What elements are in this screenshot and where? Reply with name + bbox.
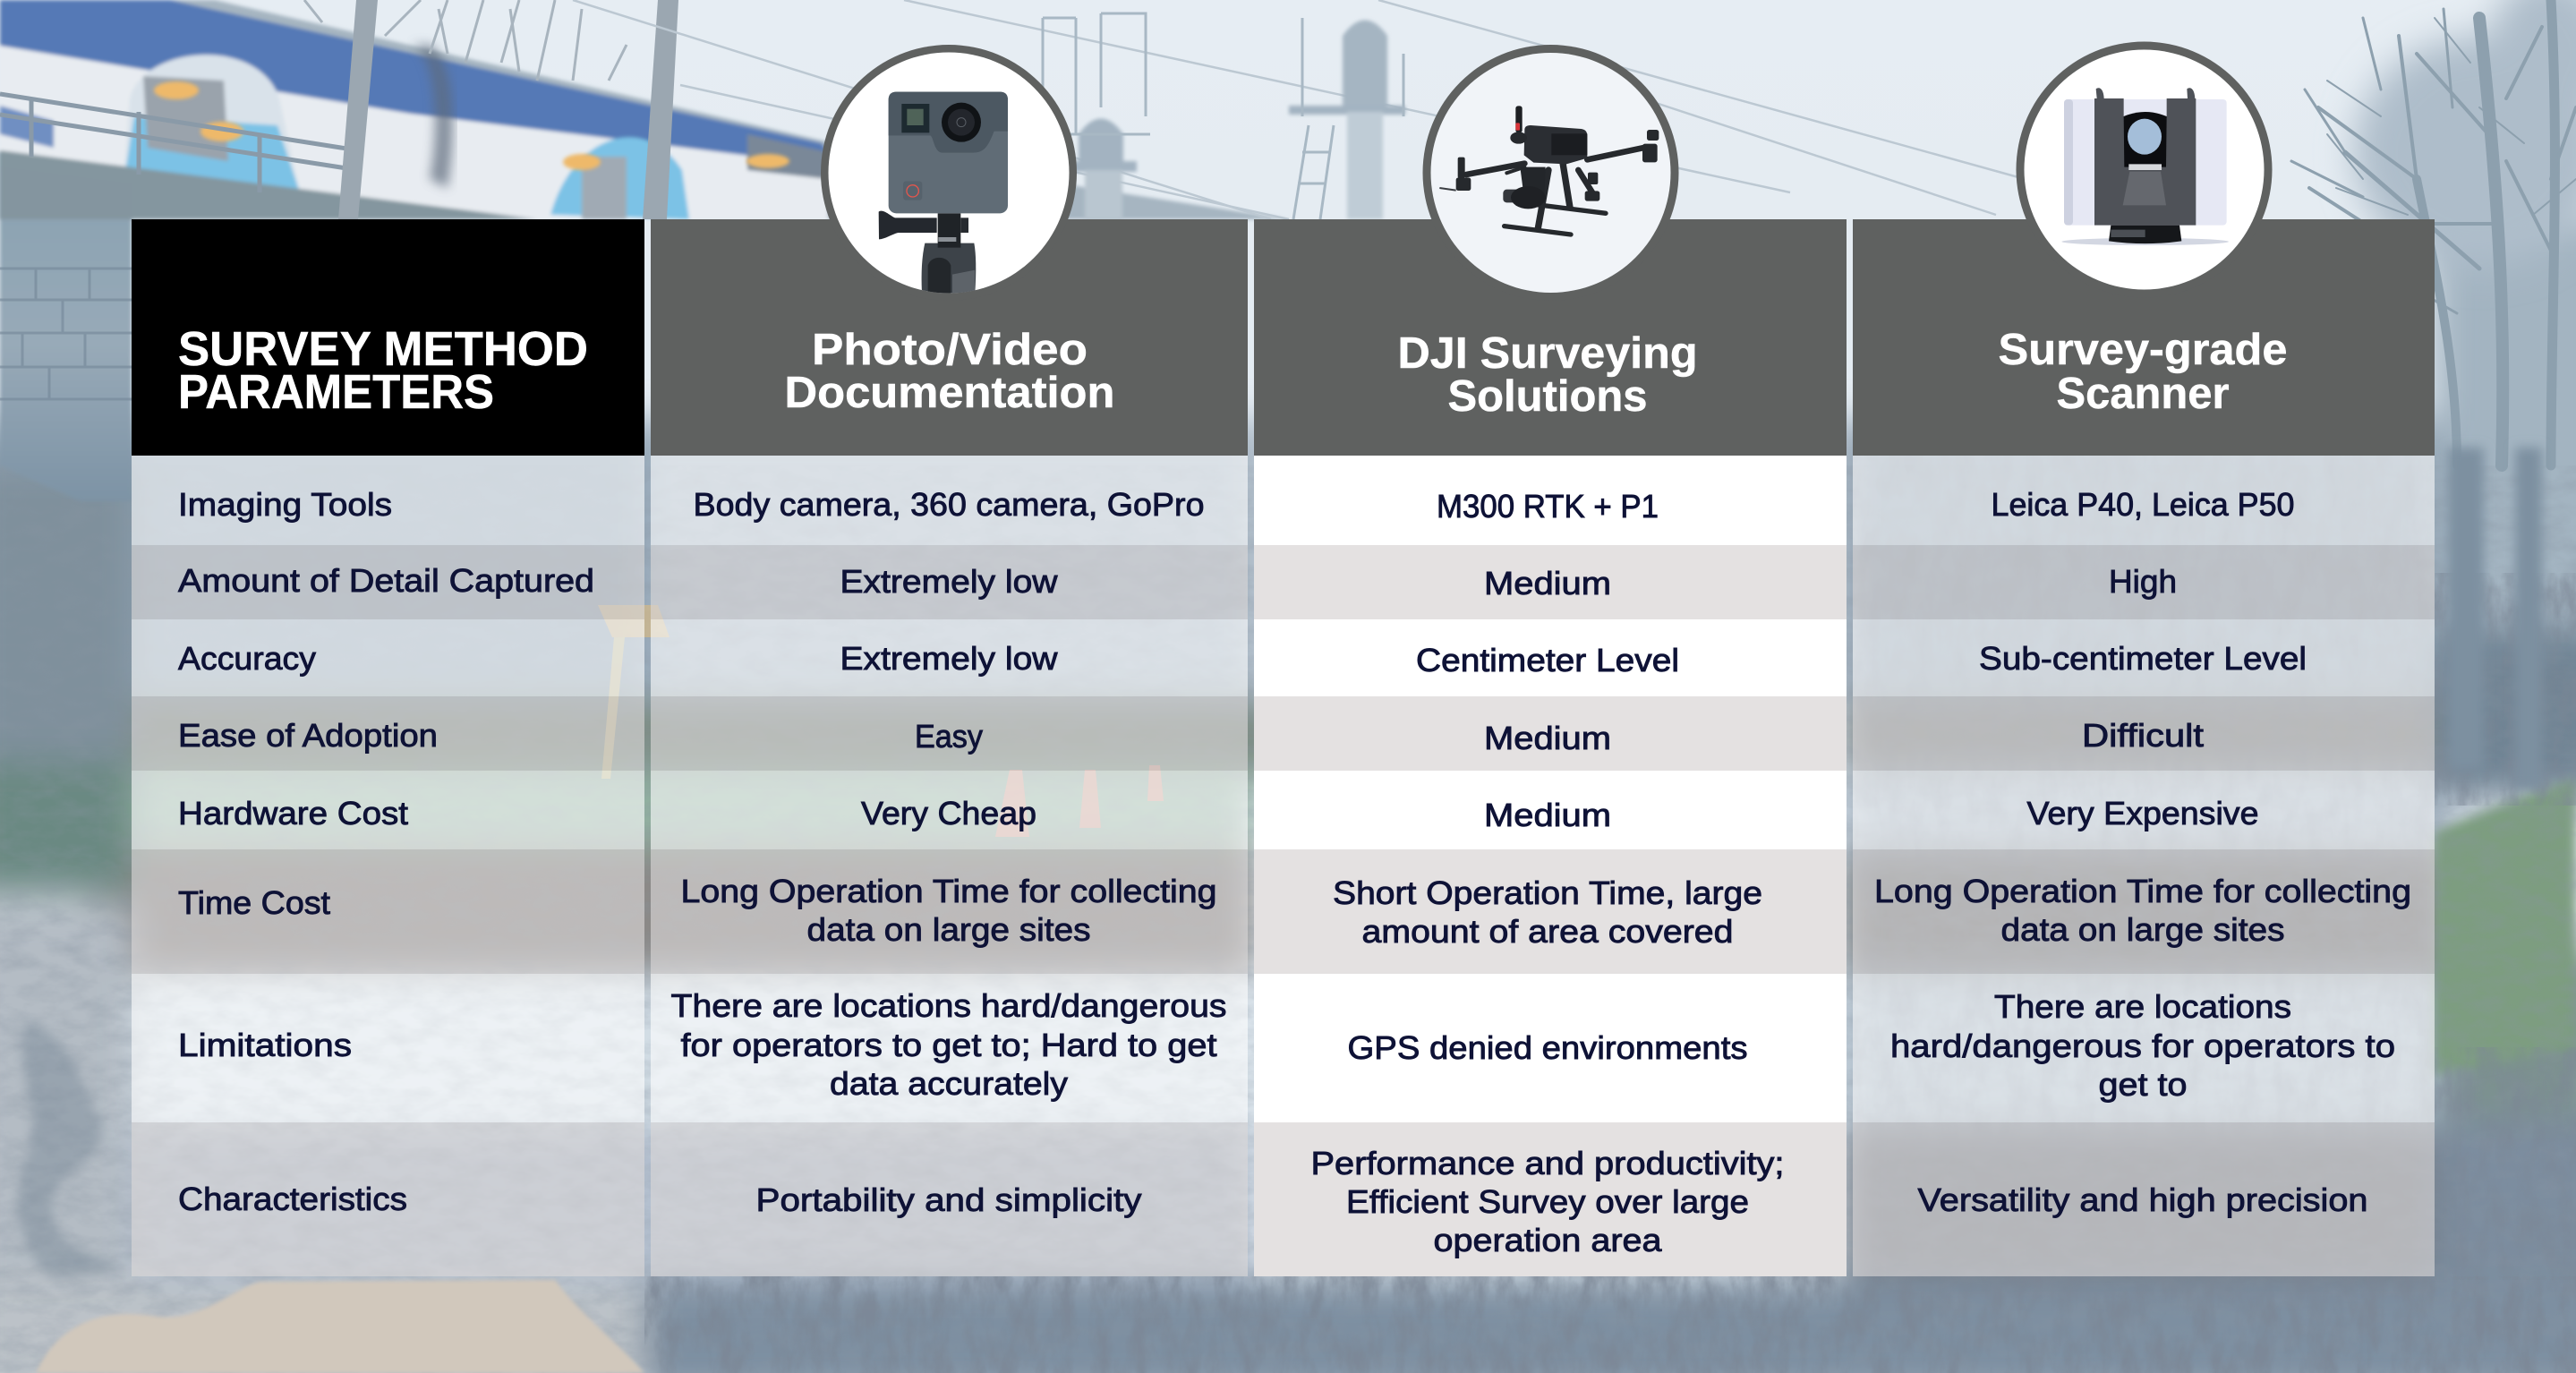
cell: hardware cost: [1853, 771, 2435, 849]
cell: limitations: data accurately: [830, 1065, 1068, 1102]
dark patches in the mud at left: [18, 1020, 125, 1280]
cell: hardware cost: Very Cheap: [861, 795, 1036, 831]
train: [0, 0, 1289, 219]
bare shrubs on bridge: [304, 0, 627, 81]
heading: photo/video documentation: [651, 219, 1248, 456]
green field: [2435, 779, 2576, 1074]
cell: time cost: Long Operation Time for collecting: [680, 873, 1217, 909]
column: photo/video documentation: [651, 219, 1248, 1276]
cell: time cost: Long Operation Time for collecting: [1874, 873, 2411, 909]
cell: characteristics: [1853, 1122, 2435, 1276]
cell: time cost: Short Operation Time, large: [1333, 874, 1762, 911]
cell: amount of detail: High: [2109, 563, 2177, 600]
row label: hardware cost: [132, 771, 644, 849]
heading: dji surveying solutions: [1254, 219, 1847, 456]
heading: dji surveying solutions: DJI Surveying: [1398, 329, 1697, 378]
row label: time cost: [132, 849, 644, 974]
row label: limitations: [132, 974, 644, 1122]
heading: survey-grade scanner: Scanner: [2057, 370, 2229, 418]
right edge vegetation texture: [2435, 573, 2576, 806]
row label: limitations: Limitations: [178, 1027, 352, 1063]
cell: accuracy: [1254, 619, 1847, 696]
cell: accuracy: [1853, 619, 2435, 696]
cell: ease of adoption: Medium: [1484, 720, 1611, 756]
cell: time cost: data on large sites: [807, 911, 1090, 948]
column: survey-grade scanner: [1853, 219, 2435, 1276]
cell: ease of adoption: [1254, 696, 1847, 771]
cell: characteristics: Performance and productivity;: [1310, 1145, 1785, 1181]
cell: limitations: for operators to get to; Hard to get: [680, 1027, 1217, 1063]
heading: survey-grade scanner: [1853, 219, 2435, 456]
row label: characteristics: Characteristics: [178, 1181, 407, 1217]
cell: time cost: [1853, 849, 2435, 974]
cell: characteristics: Versatility and high precision: [1917, 1181, 2368, 1218]
cell: characteristics: [1254, 1122, 1847, 1276]
cell: limitations: [1254, 974, 1847, 1122]
heading: survey method parameters: PARAMETERS: [178, 365, 494, 419]
bare trees on the right: [2291, 0, 2576, 465]
tree crowns on the right: [2354, 0, 2576, 269]
train lights: [154, 81, 789, 170]
cell: limitations: [651, 974, 1248, 1122]
row label: imaging tools: Imaging Tools: [178, 486, 392, 523]
row label: amount of detail captured: [132, 545, 644, 619]
catenary poles: [338, 0, 678, 219]
row label: hardware cost: Hardware Cost: [178, 795, 408, 831]
muddy puddle: [36, 1280, 644, 1373]
cell: limitations: hard/dangerous for operators to: [1890, 1028, 2395, 1064]
table panel: survey method comparison: [132, 219, 2435, 1276]
cell: hardware cost: [1254, 771, 1847, 849]
cell: time cost: [1254, 849, 1847, 974]
cell: imaging tools: [651, 456, 1248, 545]
cell: limitations: GPS denied environments: [1348, 1029, 1747, 1066]
heading: dji surveying solutions: Solutions: [1448, 372, 1647, 421]
cell: imaging tools: M300 RTK + P1: [1437, 488, 1659, 524]
row label: accuracy: Accuracy: [178, 640, 316, 677]
cell: amount of detail: [1853, 545, 2435, 619]
heading: photo/video documentation: Photo/Video: [812, 326, 1088, 374]
yellow sign post: [598, 605, 670, 779]
cell: amount of detail: Medium: [1484, 565, 1611, 601]
bushes behind scanner column: [1853, 456, 2435, 1276]
mud and grass texture: [0, 465, 2576, 1373]
cell: time cost: [651, 849, 1248, 974]
cell: accuracy: Centimeter Level: [1416, 642, 1679, 678]
row label: ease of adoption: Ease of Adoption: [178, 717, 438, 754]
heading: survey method parameters: [132, 219, 644, 456]
cell: hardware cost: [651, 771, 1248, 849]
icon: survey-grade laser scanner: [2016, 41, 2272, 297]
cell: limitations: [1853, 974, 2435, 1122]
cell: amount of detail: Extremely low: [840, 563, 1059, 600]
cell: ease of adoption: Easy: [915, 718, 983, 755]
cell: accuracy: [651, 619, 1248, 696]
cell: imaging tools: Body camera, 360 camera, GoPro: [693, 486, 1205, 523]
cell: limitations: There are locations hard/dangerous: [671, 987, 1226, 1024]
column: dji surveying solutions: [1254, 219, 1847, 1276]
cell: hardware cost: Very Expensive: [2026, 795, 2259, 831]
cell: characteristics: [651, 1122, 1248, 1276]
cell: ease of adoption: [651, 696, 1248, 771]
trunks at right edge: [2448, 448, 2542, 788]
cell: time cost: amount of area covered: [1362, 913, 1733, 950]
column: survey method parameters: [132, 219, 644, 1276]
cell: amount of detail: [1254, 545, 1847, 619]
cell: characteristics: Efficient Survey over large: [1346, 1183, 1749, 1220]
cell: accuracy: Extremely low: [840, 640, 1059, 677]
cell: accuracy: Sub-centimeter Level: [1979, 640, 2307, 677]
cell: ease of adoption: Difficult: [2082, 717, 2204, 754]
cell: characteristics: operation area: [1434, 1222, 1663, 1258]
cell: imaging tools: [1853, 456, 2435, 545]
cell: imaging tools: [1254, 456, 1847, 545]
cell: hardware cost: Medium: [1484, 797, 1611, 833]
cell: ease of adoption: [1853, 696, 2435, 771]
heading: survey-grade scanner: Survey-grade: [1998, 326, 2288, 374]
cell: amount of detail: [651, 545, 1248, 619]
cell: limitations: get to: [2098, 1066, 2188, 1103]
row label: accuracy: [132, 619, 644, 696]
heading: photo/video documentation: Documentation: [784, 369, 1115, 417]
bridge wall: [0, 152, 132, 501]
row label: imaging tools: [132, 456, 644, 545]
cell: characteristics: Portability and simplicity: [755, 1181, 1142, 1218]
overhead wires: [573, 0, 2041, 219]
row label: amount of detail captured: Amount of Detail Captured: [178, 562, 594, 599]
icon: DJI drone with camera payload: [1423, 45, 1679, 301]
heading: survey method parameters: SURVEY METHOD: [178, 322, 588, 376]
row label: ease of adoption: [132, 696, 644, 771]
cell: limitations: There are locations: [1994, 988, 2291, 1025]
row label: time cost: Time Cost: [178, 884, 330, 921]
motion blur of train carriage joint: [412, 45, 453, 188]
cell: imaging tools: Leica P40, Leica P50: [1991, 486, 2295, 523]
bridge railing: [0, 94, 358, 192]
icon: 360 camera on mini tripod: [821, 45, 1077, 301]
signal towers: [1065, 20, 1405, 219]
cell: time cost: data on large sites: [2001, 911, 2284, 948]
row label: characteristics: [132, 1122, 644, 1276]
foreground grass texture: [644, 1276, 2576, 1373]
traffic cones seen through table: [995, 765, 1164, 837]
